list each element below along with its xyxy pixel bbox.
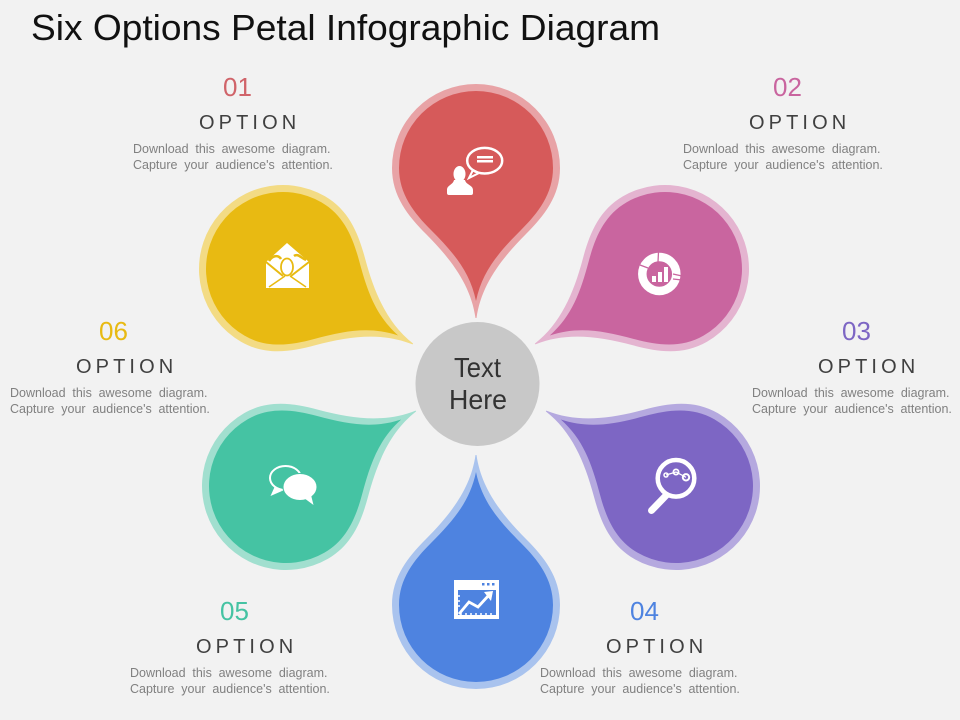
icon: envelope with people — [266, 243, 309, 288]
option 04 text: 04 — [630, 596, 659, 626]
petal 01: red — [392, 84, 560, 318]
center circle — [416, 322, 540, 446]
icon: chat bubbles — [270, 466, 317, 505]
icon: magnifier with line chart — [652, 460, 694, 510]
center circle: Here — [449, 384, 507, 415]
option 05 text: Download this awesome diagram. — [130, 666, 328, 680]
option 01 text: Download this awesome diagram. — [133, 142, 330, 156]
option 06 text: Download this awesome diagram. — [10, 386, 208, 400]
center circle: Text — [454, 352, 501, 383]
option 04 text — [540, 596, 740, 696]
option 05 text: 05 — [220, 596, 249, 626]
option 02 text: OPTION — [749, 112, 850, 134]
title: Six Options Petal Infographic Diagram — [31, 7, 660, 48]
option 03 text — [752, 316, 952, 416]
option 04 text: Capture your audience's attention. — [540, 682, 740, 696]
option 02 text: 02 — [773, 72, 802, 102]
option 03 text: Capture your audience's attention. — [752, 402, 952, 416]
option 06 text: 06 — [99, 316, 128, 346]
icon: donut chart — [640, 252, 682, 291]
icon: person with speech bubble — [447, 148, 502, 195]
option 01 text: 01 — [223, 72, 252, 102]
petal 02: pink — [493, 154, 780, 417]
option 02 text: Capture your audience's attention. — [683, 158, 883, 172]
option 01 text: Capture your audience's attention. — [133, 158, 333, 172]
option 03 text: 03 — [842, 316, 871, 346]
option 06 text — [10, 316, 210, 416]
option 04 text: OPTION — [606, 636, 707, 658]
option 01 text: OPTION — [199, 112, 300, 134]
petal 05: green — [171, 338, 458, 601]
option 05 text — [130, 596, 330, 696]
option 05 text: Capture your audience's attention. — [130, 682, 330, 696]
option 05 text: OPTION — [196, 636, 297, 658]
option 01 text — [133, 72, 333, 172]
option 04 text: Download this awesome diagram. — [540, 666, 738, 680]
icon: browser window with rising chart — [454, 580, 499, 619]
option 02 text — [683, 72, 883, 172]
petal 06: yellow — [168, 154, 455, 417]
option 06 text: OPTION — [76, 356, 177, 378]
option 03 text: OPTION — [818, 356, 919, 378]
option 03 text: Download this awesome diagram. — [752, 386, 950, 400]
petal 03: purple — [504, 338, 791, 601]
option 06 text: Capture your audience's attention. — [10, 402, 210, 416]
option 02 text: Download this awesome diagram. — [683, 142, 880, 156]
petal 04: blue — [392, 455, 560, 689]
